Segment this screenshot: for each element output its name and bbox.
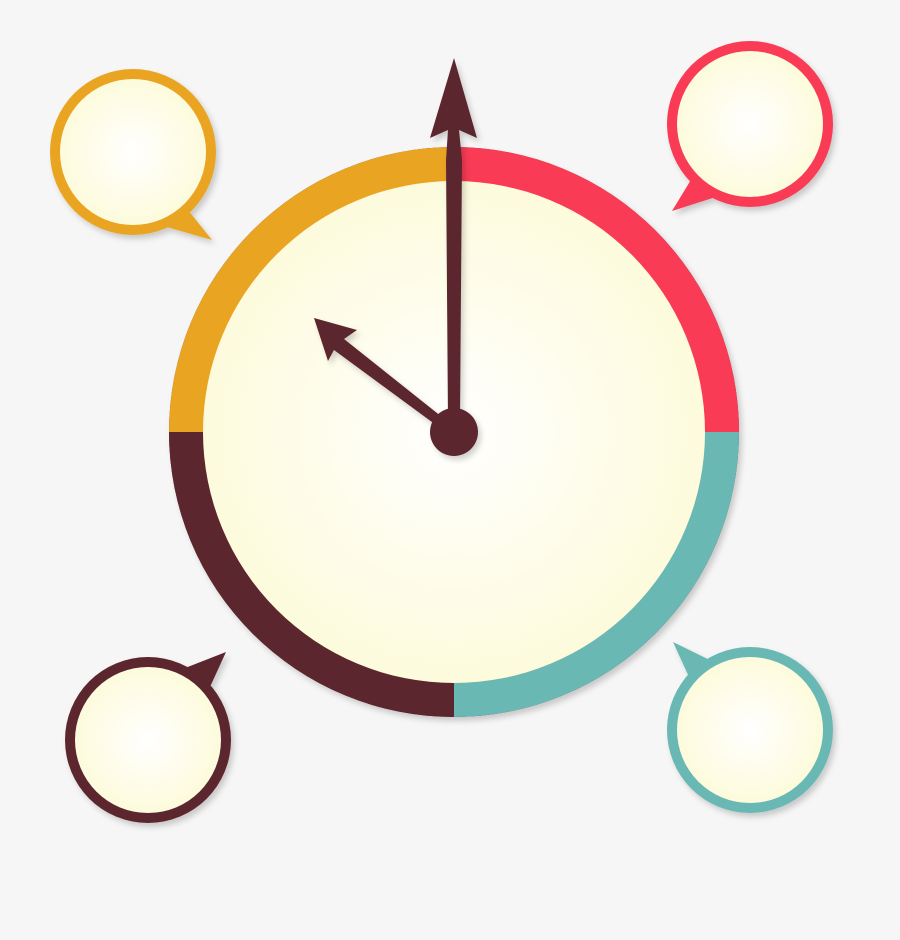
- ring segment: orange: [169, 147, 454, 432]
- bubble: maroon bottom-left: [65, 652, 231, 823]
- ring segment: maroon: [169, 432, 454, 717]
- center pin: [430, 408, 478, 456]
- minute hand: [430, 58, 477, 420]
- bubble: red top-right: [667, 41, 833, 211]
- bubble: teal bottom-right: [667, 642, 833, 813]
- clock face: [169, 147, 739, 717]
- ring segment: teal: [454, 432, 739, 717]
- hour hand: [314, 318, 442, 425]
- bubble: orange top-left: [50, 69, 216, 240]
- ring segment: red: [454, 147, 739, 432]
